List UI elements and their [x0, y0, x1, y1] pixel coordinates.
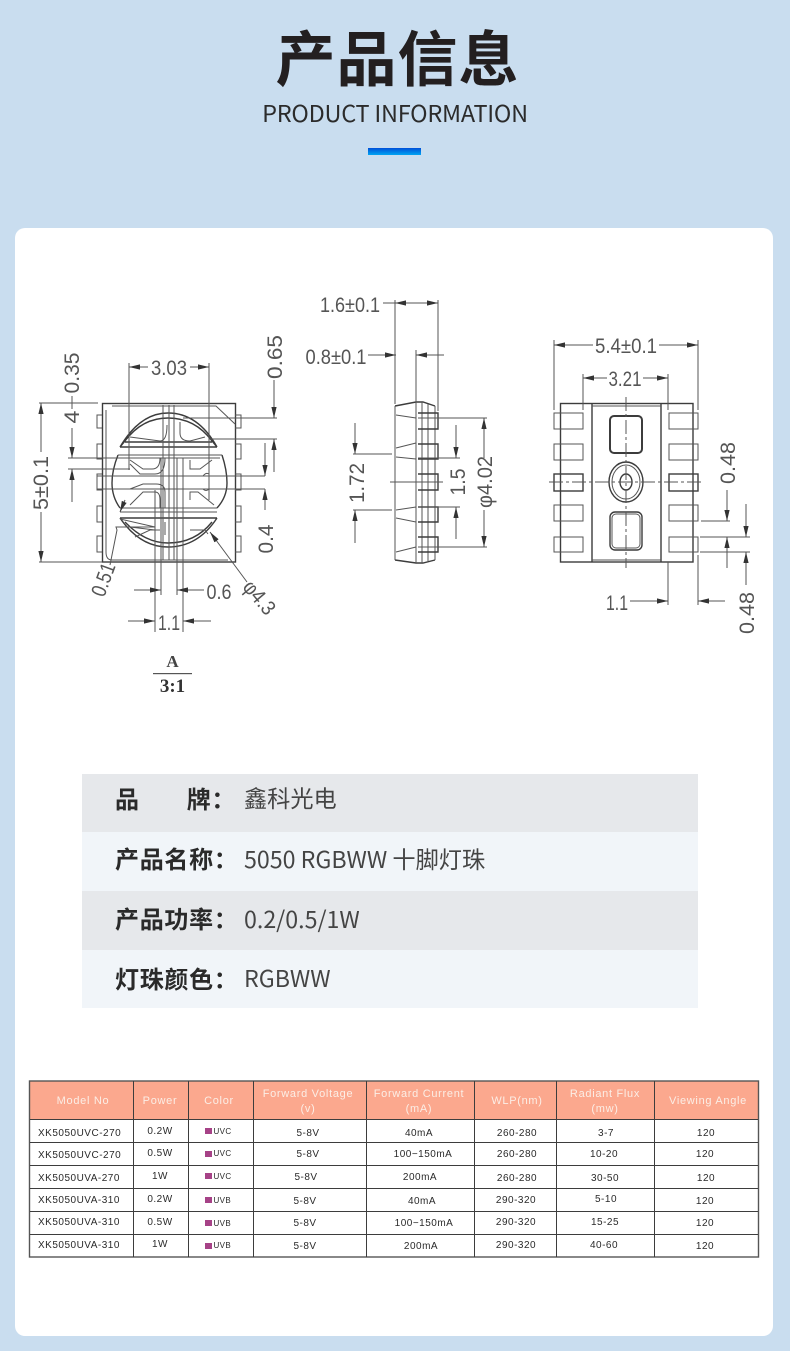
dimension labels: 5±0.1: [30, 456, 53, 510]
table row 1: 5-8V: [296, 1128, 320, 1139]
title: 产品信息: [276, 12, 520, 99]
scale note A 3:1: [153, 652, 192, 697]
table row 6: 120: [696, 1241, 714, 1252]
table row 4: UVB: [214, 1196, 231, 1205]
dimension labels: 0.4: [255, 524, 278, 554]
table row 6: 200mA: [404, 1241, 438, 1252]
dimension labels: 0.35: [61, 352, 84, 394]
table header: Power: [143, 1095, 177, 1107]
dimension labels: 3.21: [608, 368, 642, 391]
table row 4: 120: [696, 1196, 714, 1207]
table header: (mA): [406, 1103, 432, 1115]
dimension labels: 1.72: [346, 463, 369, 503]
dimension lines: [554, 340, 750, 605]
table header: Forward Current: [374, 1088, 464, 1100]
dimension labels: 1.5: [447, 468, 470, 496]
body and pads: [554, 404, 698, 562]
value: RGBWW: [244, 960, 331, 994]
side profile: [395, 402, 438, 563]
table row 1: 0.2W: [147, 1126, 173, 1137]
table row 4: 290-320: [496, 1195, 536, 1206]
spec row: product name: [82, 832, 698, 891]
package body and pins: [97, 404, 241, 562]
dimension labels: 0.51: [87, 560, 121, 600]
table row 1: [38, 1126, 715, 1139]
table row 5: [38, 1217, 714, 1229]
dimension labels: 1.1: [606, 592, 628, 615]
table row 1: 3-7: [598, 1128, 614, 1139]
dimension labels: [30, 335, 287, 635]
table row 5: 0.5W: [147, 1217, 173, 1228]
label: 产品功率：: [115, 900, 238, 935]
drawing: top view with dimensions: [30, 335, 287, 697]
table row 2: 120: [696, 1149, 714, 1160]
dimension lines: [353, 300, 487, 547]
drawing: bottom view with dimensions: [549, 335, 759, 634]
table row 1: XK5050UVC-270: [38, 1128, 121, 1139]
table row 3: 30-50: [591, 1173, 619, 1184]
spec row: brand: [82, 774, 698, 832]
dimension labels: 1.1: [158, 612, 180, 635]
dimension labels: 5.4±0.1: [595, 335, 657, 358]
table row 2: [38, 1148, 714, 1161]
lead traces: [39, 363, 277, 632]
table row 2: XK5050UVC-270: [38, 1150, 121, 1161]
table row 5: 100−150mA: [395, 1218, 453, 1229]
table row 3: 260-280: [497, 1173, 537, 1184]
dimension labels: 3.03: [151, 357, 187, 380]
table row 5: UVB: [214, 1219, 231, 1228]
table row 5: XK5050UVA-310: [38, 1217, 120, 1228]
table row 4: 40mA: [408, 1196, 436, 1207]
panel: white card: [15, 228, 773, 1336]
scale note A 3:1: 3:1: [160, 676, 185, 697]
table row 5: 15-25: [591, 1217, 619, 1228]
technical drawings: [30, 294, 759, 697]
accent bar: [368, 148, 421, 155]
table row 6: [38, 1239, 714, 1252]
table row 3: XK5050UVA-270: [38, 1173, 120, 1184]
table row 6: 290-320: [496, 1240, 536, 1251]
table row 1: 260-280: [497, 1128, 537, 1139]
dimension labels: 1.6±0.1: [320, 294, 380, 317]
table row 1: UVC: [214, 1127, 232, 1136]
label: 灯珠颜色：: [115, 960, 238, 994]
dimension labels: 0.6: [206, 581, 232, 604]
dimension labels: 0.48: [717, 442, 740, 484]
dimension labels: 0.48: [736, 592, 759, 634]
table header: [30, 1081, 758, 1119]
table row 5: 120: [696, 1218, 714, 1229]
value: 鑫科光电: [244, 780, 337, 814]
table row 2: 10-20: [590, 1149, 618, 1160]
dimension labels: φ4.3: [238, 576, 280, 620]
label: 品 牌：: [115, 780, 236, 814]
drawing: side view with dimensions: [306, 294, 497, 563]
table row 3: 1W: [152, 1171, 168, 1182]
table grid: [30, 1081, 758, 1257]
table header: (mw): [591, 1103, 619, 1115]
subtitle: PRODUCT INFORMATION: [262, 94, 528, 128]
scale note A 3:1: A: [166, 652, 179, 671]
table row 6: 5-8V: [293, 1241, 317, 1252]
table row 2: 0.5W: [147, 1148, 173, 1159]
table header: (v): [301, 1103, 315, 1115]
dimension labels: 0.65: [264, 335, 287, 379]
table row 2: 100−150mA: [394, 1149, 452, 1160]
table row 4: 0.2W: [147, 1194, 173, 1205]
dimension labels: [306, 294, 497, 508]
dimension labels: 0.8±0.1: [306, 346, 366, 369]
table row 2: UVC: [214, 1149, 232, 1158]
value: 5050 RGBWW 十脚灯珠: [244, 840, 485, 874]
dimension labels: [595, 335, 759, 634]
dimension lines: [41, 367, 274, 621]
table row 3: [38, 1171, 715, 1184]
table row 3: 200mA: [403, 1172, 437, 1183]
dimension labels: 4: [61, 410, 84, 424]
dimension labels: φ4.02: [474, 456, 497, 508]
table row 1: 120: [697, 1128, 715, 1139]
table row 5: 5-8V: [293, 1218, 317, 1229]
table row 5: 290-320: [496, 1217, 536, 1228]
chip windows and lens ring: [549, 397, 704, 568]
table row 2: 5-8V: [296, 1149, 320, 1160]
table row 6: XK5050UVA-310: [38, 1240, 120, 1251]
table row 4: 5-10: [595, 1194, 617, 1205]
table header: Viewing Angle: [669, 1095, 747, 1107]
table row 4: XK5050UVA-310: [38, 1195, 120, 1206]
table header: Model No: [57, 1095, 109, 1107]
table header: Color: [204, 1095, 234, 1107]
table row 2: 260-280: [497, 1149, 537, 1160]
table header: Radiant Flux: [570, 1088, 640, 1100]
domed lens segments: [112, 413, 227, 547]
table row 4: [38, 1194, 714, 1207]
table header: Forward Voltage: [263, 1088, 353, 1100]
spec row: bead colour: [82, 950, 698, 1008]
value: 0.2/0.5/1W: [244, 900, 360, 934]
label: 产品名称：: [115, 840, 238, 875]
table row 6: 40-60: [590, 1240, 618, 1251]
table row 6: UVB: [214, 1241, 231, 1250]
table row 3: UVC: [214, 1172, 232, 1181]
table row 3: 120: [697, 1173, 715, 1184]
table row 4: 5-8V: [293, 1196, 317, 1207]
table header: WLP(nm): [491, 1095, 543, 1107]
table row 6: 1W: [152, 1239, 168, 1250]
spec row: power: [82, 891, 698, 950]
table row 1: 40mA: [405, 1128, 433, 1139]
table row 3: 5-8V: [294, 1172, 318, 1183]
